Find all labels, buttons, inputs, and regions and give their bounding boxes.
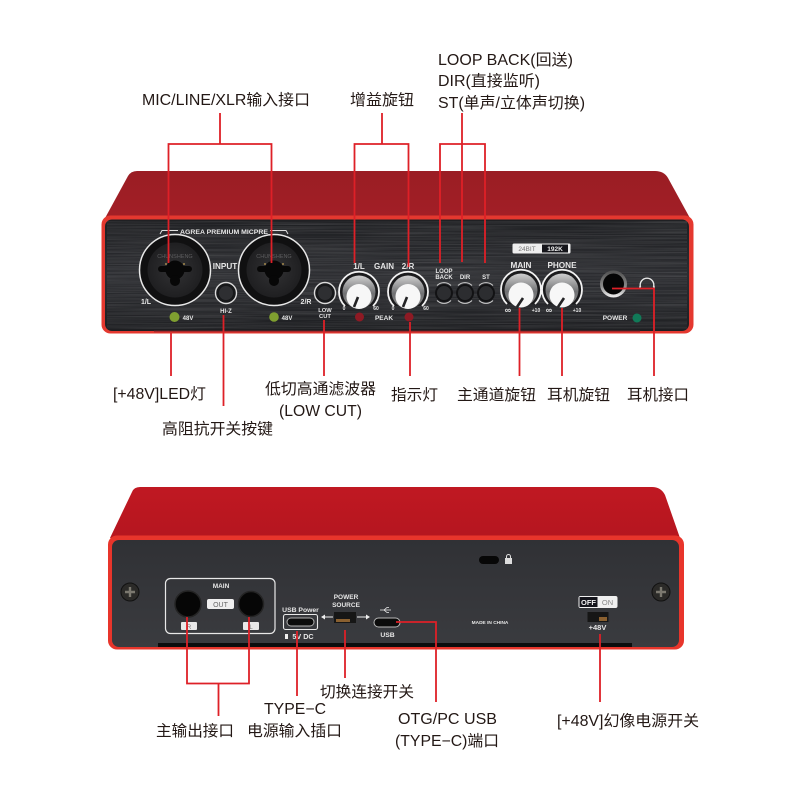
lock slot: [479, 554, 512, 564]
label: loop back, dir, st: [438, 51, 585, 112]
input labels: 1/L: [141, 299, 152, 306]
leader: main knob: [518, 308, 520, 376]
phantom switch: OFF: [581, 598, 596, 607]
power source switch: [321, 594, 370, 623]
power source switch: SOURCE: [332, 602, 361, 609]
leader: gain knobs: [354, 113, 408, 267]
48v led right: [269, 312, 292, 322]
phantom switch: [578, 596, 618, 632]
label: usb power: [247, 701, 342, 740]
low cut button: LOW: [318, 308, 332, 314]
label: usb power: TYPE−C: [264, 701, 326, 718]
usb type-c port: [374, 608, 400, 639]
label: loop back, dir, st: LOOP BACK(回送): [438, 51, 573, 69]
gain labels: 2/R: [402, 262, 414, 271]
label: phantom switch: [+48V]幻像电源开关: [557, 712, 699, 730]
label: gain knob: 增益旋钮: [350, 91, 414, 109]
xlr connector right: [238, 234, 310, 306]
label: low cut: 低切高通滤波器: [265, 380, 376, 398]
24bit 192k badge: 192K: [547, 246, 563, 253]
label: phone knob: 耳机旋钮: [547, 386, 610, 404]
front red frame: [102, 216, 694, 334]
leader: 48v led: [170, 333, 172, 376]
loop back button: LOOP: [435, 269, 453, 275]
power led: POWER: [603, 315, 628, 322]
main knob: MAIN: [511, 261, 532, 270]
made in china: MADE IN CHINA: [472, 620, 509, 626]
screw right: [652, 583, 670, 601]
hi-z button: HI-Z: [220, 309, 232, 315]
leader: power source: [344, 630, 346, 678]
xlr connector left: CHUNSHENG: [157, 254, 193, 260]
st button: [477, 275, 495, 303]
hi-z button: [216, 282, 236, 315]
premium micpre heading: AGREA PREMIUM MICPRE: [180, 229, 268, 236]
main output group: L: [249, 625, 253, 631]
power source switch: POWER: [334, 594, 359, 601]
input labels: [141, 262, 311, 306]
gain labels: GAIN: [374, 262, 394, 271]
leader: hi-z: [222, 315, 224, 406]
label: loop back, dir, st: DIR(直接监听): [438, 72, 540, 90]
xlr connector right: CHUNSHENG: [256, 254, 292, 260]
screw left: [121, 583, 139, 601]
front top face: [104, 171, 691, 220]
phone knob: +10: [573, 308, 581, 314]
rear bottom shadow strip: [158, 643, 632, 647]
leader: usb port: [396, 622, 436, 702]
main output group: [166, 578, 275, 634]
gain labels: 0: [343, 306, 346, 312]
phantom switch: ON: [602, 598, 613, 607]
leader: headphone jack: [612, 288, 654, 376]
main knob: [501, 261, 541, 315]
gain labels: [343, 262, 429, 312]
gain labels: 60: [423, 306, 429, 312]
label: usb port: [395, 711, 499, 750]
label: headphone jack: 耳机接口: [627, 386, 689, 404]
48v led right: 48V: [282, 316, 292, 322]
leader: loop back, dir, st: [440, 113, 485, 263]
label: low cut: (LOW CUT): [279, 403, 362, 420]
48v led left: 48V: [183, 316, 193, 322]
main output group: R: [187, 625, 192, 631]
icon: headphones: [640, 278, 654, 289]
device: front view: [102, 171, 694, 334]
gain labels: 60: [373, 306, 379, 312]
phone knob: [542, 261, 582, 315]
label: indicator: 指示灯: [391, 386, 438, 404]
phone knob: ∞: [546, 305, 553, 315]
main knob: +10: [532, 308, 540, 314]
phantom switch: +48V: [589, 623, 606, 632]
gain labels: 0: [392, 306, 395, 312]
leader: usb power: [296, 631, 298, 696]
gain knob 1/L: [339, 272, 379, 309]
usb power port: USB Power: [282, 607, 319, 614]
48v led left: [170, 312, 193, 322]
peak leds: PEAK: [375, 315, 393, 322]
label: power source: 切换连接开关: [320, 683, 414, 701]
leader: peak: [409, 322, 411, 376]
leader: xlr input: [168, 113, 272, 263]
label: main output: 主输出接口: [156, 722, 234, 740]
rear top face: [110, 487, 680, 538]
front bottom edge: [154, 330, 640, 332]
peak leds: [355, 312, 414, 322]
input labels: INPUT: [213, 262, 237, 271]
gain labels: 1/L: [353, 262, 365, 271]
main output group: OUT: [213, 602, 229, 609]
low cut button: CUT: [319, 314, 331, 320]
main knob: ∞: [505, 305, 512, 315]
dir button: [456, 275, 474, 303]
leader: low cut: [323, 320, 325, 376]
rear red frame: [108, 536, 684, 650]
usb type-c port: USB: [380, 632, 395, 639]
st button: ST: [482, 275, 490, 281]
power led: [603, 314, 642, 322]
front black panel: [105, 220, 689, 331]
label: hi-z: 高阻抗开关按键: [162, 420, 273, 438]
rear grey panel: [112, 540, 679, 647]
label: loop back, dir, st: ST(单声/立体声切换): [438, 94, 585, 112]
label: low cut: [265, 380, 376, 420]
leader: main output: [187, 617, 249, 716]
loop back button: [435, 269, 453, 303]
label: usb power: 电源输入插口: [247, 722, 342, 740]
premium micpre heading: [160, 229, 288, 236]
24bit 192k badge: [512, 244, 570, 254]
label: 48v led: [+48V]LED灯: [113, 385, 206, 403]
dir button: DIR: [460, 275, 471, 281]
24bit 192k badge: 24BIT: [518, 246, 536, 253]
phone knob: PHONE: [547, 261, 577, 270]
label: usb port: (TYPE−C)端口: [395, 732, 499, 750]
main output group: MAIN: [213, 583, 230, 590]
label: main knob: 主通道旋钮: [457, 386, 536, 404]
gain knob 2/R: [388, 272, 428, 309]
headphone jack: [602, 272, 626, 296]
label: usb port: OTG/PC USB: [398, 711, 497, 728]
label: xlr input: MIC/LINE/XLR输入接口: [142, 91, 310, 109]
input labels: 2/R: [301, 299, 311, 306]
leader: phantom switch: [599, 634, 601, 702]
usb power port: [282, 607, 319, 641]
low cut button: [314, 282, 336, 320]
loop back button: BACK: [435, 275, 453, 281]
device: rear view: [108, 487, 684, 650]
leader: phone knob: [561, 308, 563, 376]
xlr connector left: [140, 234, 210, 306]
usb power port: 5V DC: [292, 632, 314, 641]
